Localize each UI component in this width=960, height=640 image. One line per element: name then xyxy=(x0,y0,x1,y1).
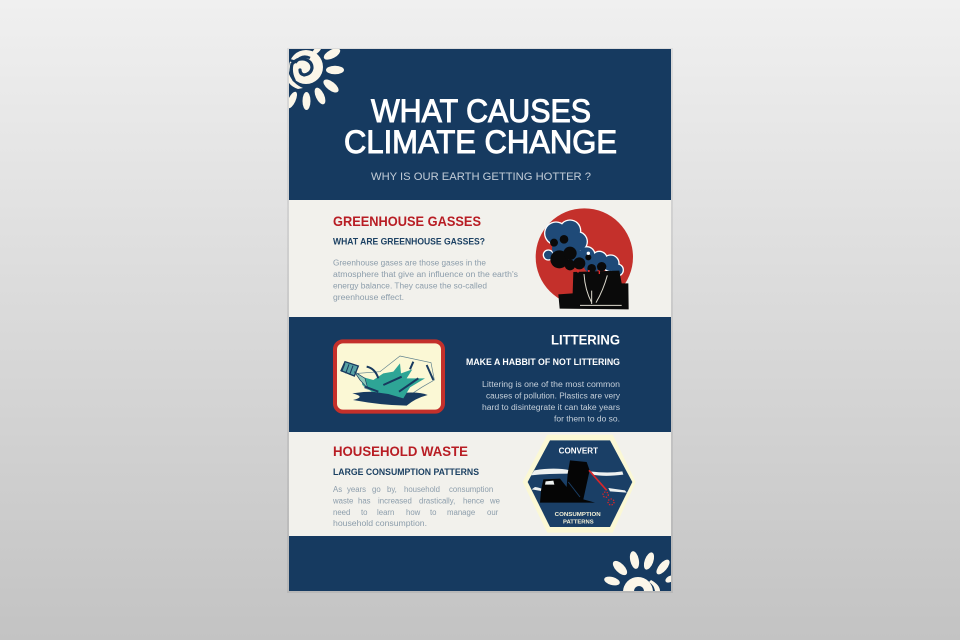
panel: household waste band xyxy=(289,432,671,536)
subheading: what are greenhouse gasses: WHAT ARE GREENHOUSE GASSES? xyxy=(333,236,485,246)
text block: household waste: manage xyxy=(447,508,475,517)
text block: household waste: has xyxy=(358,496,371,506)
subheading: large consumption patterns: LARGE CONSUMPTION PATTERNS xyxy=(333,467,479,477)
icon: truck hexagon badge: CONVERT xyxy=(559,447,598,456)
icon: plastic bottle card xyxy=(335,341,443,412)
text block: household waste: we xyxy=(489,496,500,506)
text block: littering: hard to disintegrate it can take years xyxy=(482,403,620,412)
icon: truck hexagon badge: PATTERNS xyxy=(563,520,594,526)
title xyxy=(344,93,617,160)
icon: truck hexagon badge: CONSUMPTION xyxy=(555,512,601,518)
text block: household waste: increased xyxy=(378,496,412,506)
text block: household waste: waste xyxy=(332,496,353,506)
subtitle: WHY IS OUR EARTH GETTING HOTTER ? xyxy=(371,171,591,183)
text block: greenhouse gasses: energy balance. They cause the so-called xyxy=(333,282,487,290)
heading: greenhouse gasses: GREENHOUSE GASSES xyxy=(333,214,481,229)
icon: sun bottom right xyxy=(604,551,671,591)
icon: factory smoke on red circle xyxy=(536,208,633,309)
text block: littering xyxy=(482,380,620,424)
heading: littering: LITTERING xyxy=(551,332,620,348)
icon: sun top left xyxy=(289,49,344,110)
text block: household waste: to xyxy=(430,508,437,517)
text block: household waste: how xyxy=(406,508,421,517)
poster xyxy=(285,44,676,607)
text block: household waste: to xyxy=(361,508,368,517)
text block: household waste: go xyxy=(372,485,381,494)
text block: household waste: need xyxy=(333,508,350,517)
text block: littering: Littering is one of the most common xyxy=(482,380,620,389)
panel: littering band xyxy=(289,317,671,432)
panel: header band xyxy=(289,49,671,200)
text block: household waste: by, xyxy=(387,485,397,494)
text block: household waste: learn xyxy=(377,508,394,517)
text block: household waste xyxy=(332,485,500,528)
text block: littering: for them to do so. xyxy=(554,414,620,424)
text block: household waste: drastically, xyxy=(419,496,455,506)
text block: greenhouse gasses: greenhouse effect. xyxy=(333,293,404,302)
icon: truck hexagon badge xyxy=(523,435,635,532)
text block: greenhouse gasses: Greenhouse gases are those gases in the xyxy=(333,258,486,268)
panel: footer band xyxy=(289,536,671,591)
text block: household waste: hence xyxy=(463,496,484,506)
subheading: make a habbit: MAKE A HABBIT OF NOT LITTERING xyxy=(466,357,620,367)
text block: greenhouse gasses: atmosphere that give an influence on the earth's xyxy=(333,270,518,279)
text block: household waste: our xyxy=(487,508,499,517)
text block: household waste: years xyxy=(347,485,366,494)
text block: household waste: As xyxy=(333,485,342,494)
text block: household waste: consumption xyxy=(449,485,493,494)
text block: household waste: household consumption. xyxy=(333,519,427,528)
text block: greenhouse gasses xyxy=(333,258,518,302)
text block: littering: causes of pollution. Plastics are very xyxy=(486,392,620,400)
title: WHAT CAUSES xyxy=(371,93,591,129)
heading: household waste: HOUSEHOLD WASTE xyxy=(333,444,468,459)
text block: household waste: household xyxy=(404,485,440,494)
panel: greenhouse gasses band xyxy=(289,200,671,317)
title: CLIMATE CHANGE xyxy=(344,124,617,160)
